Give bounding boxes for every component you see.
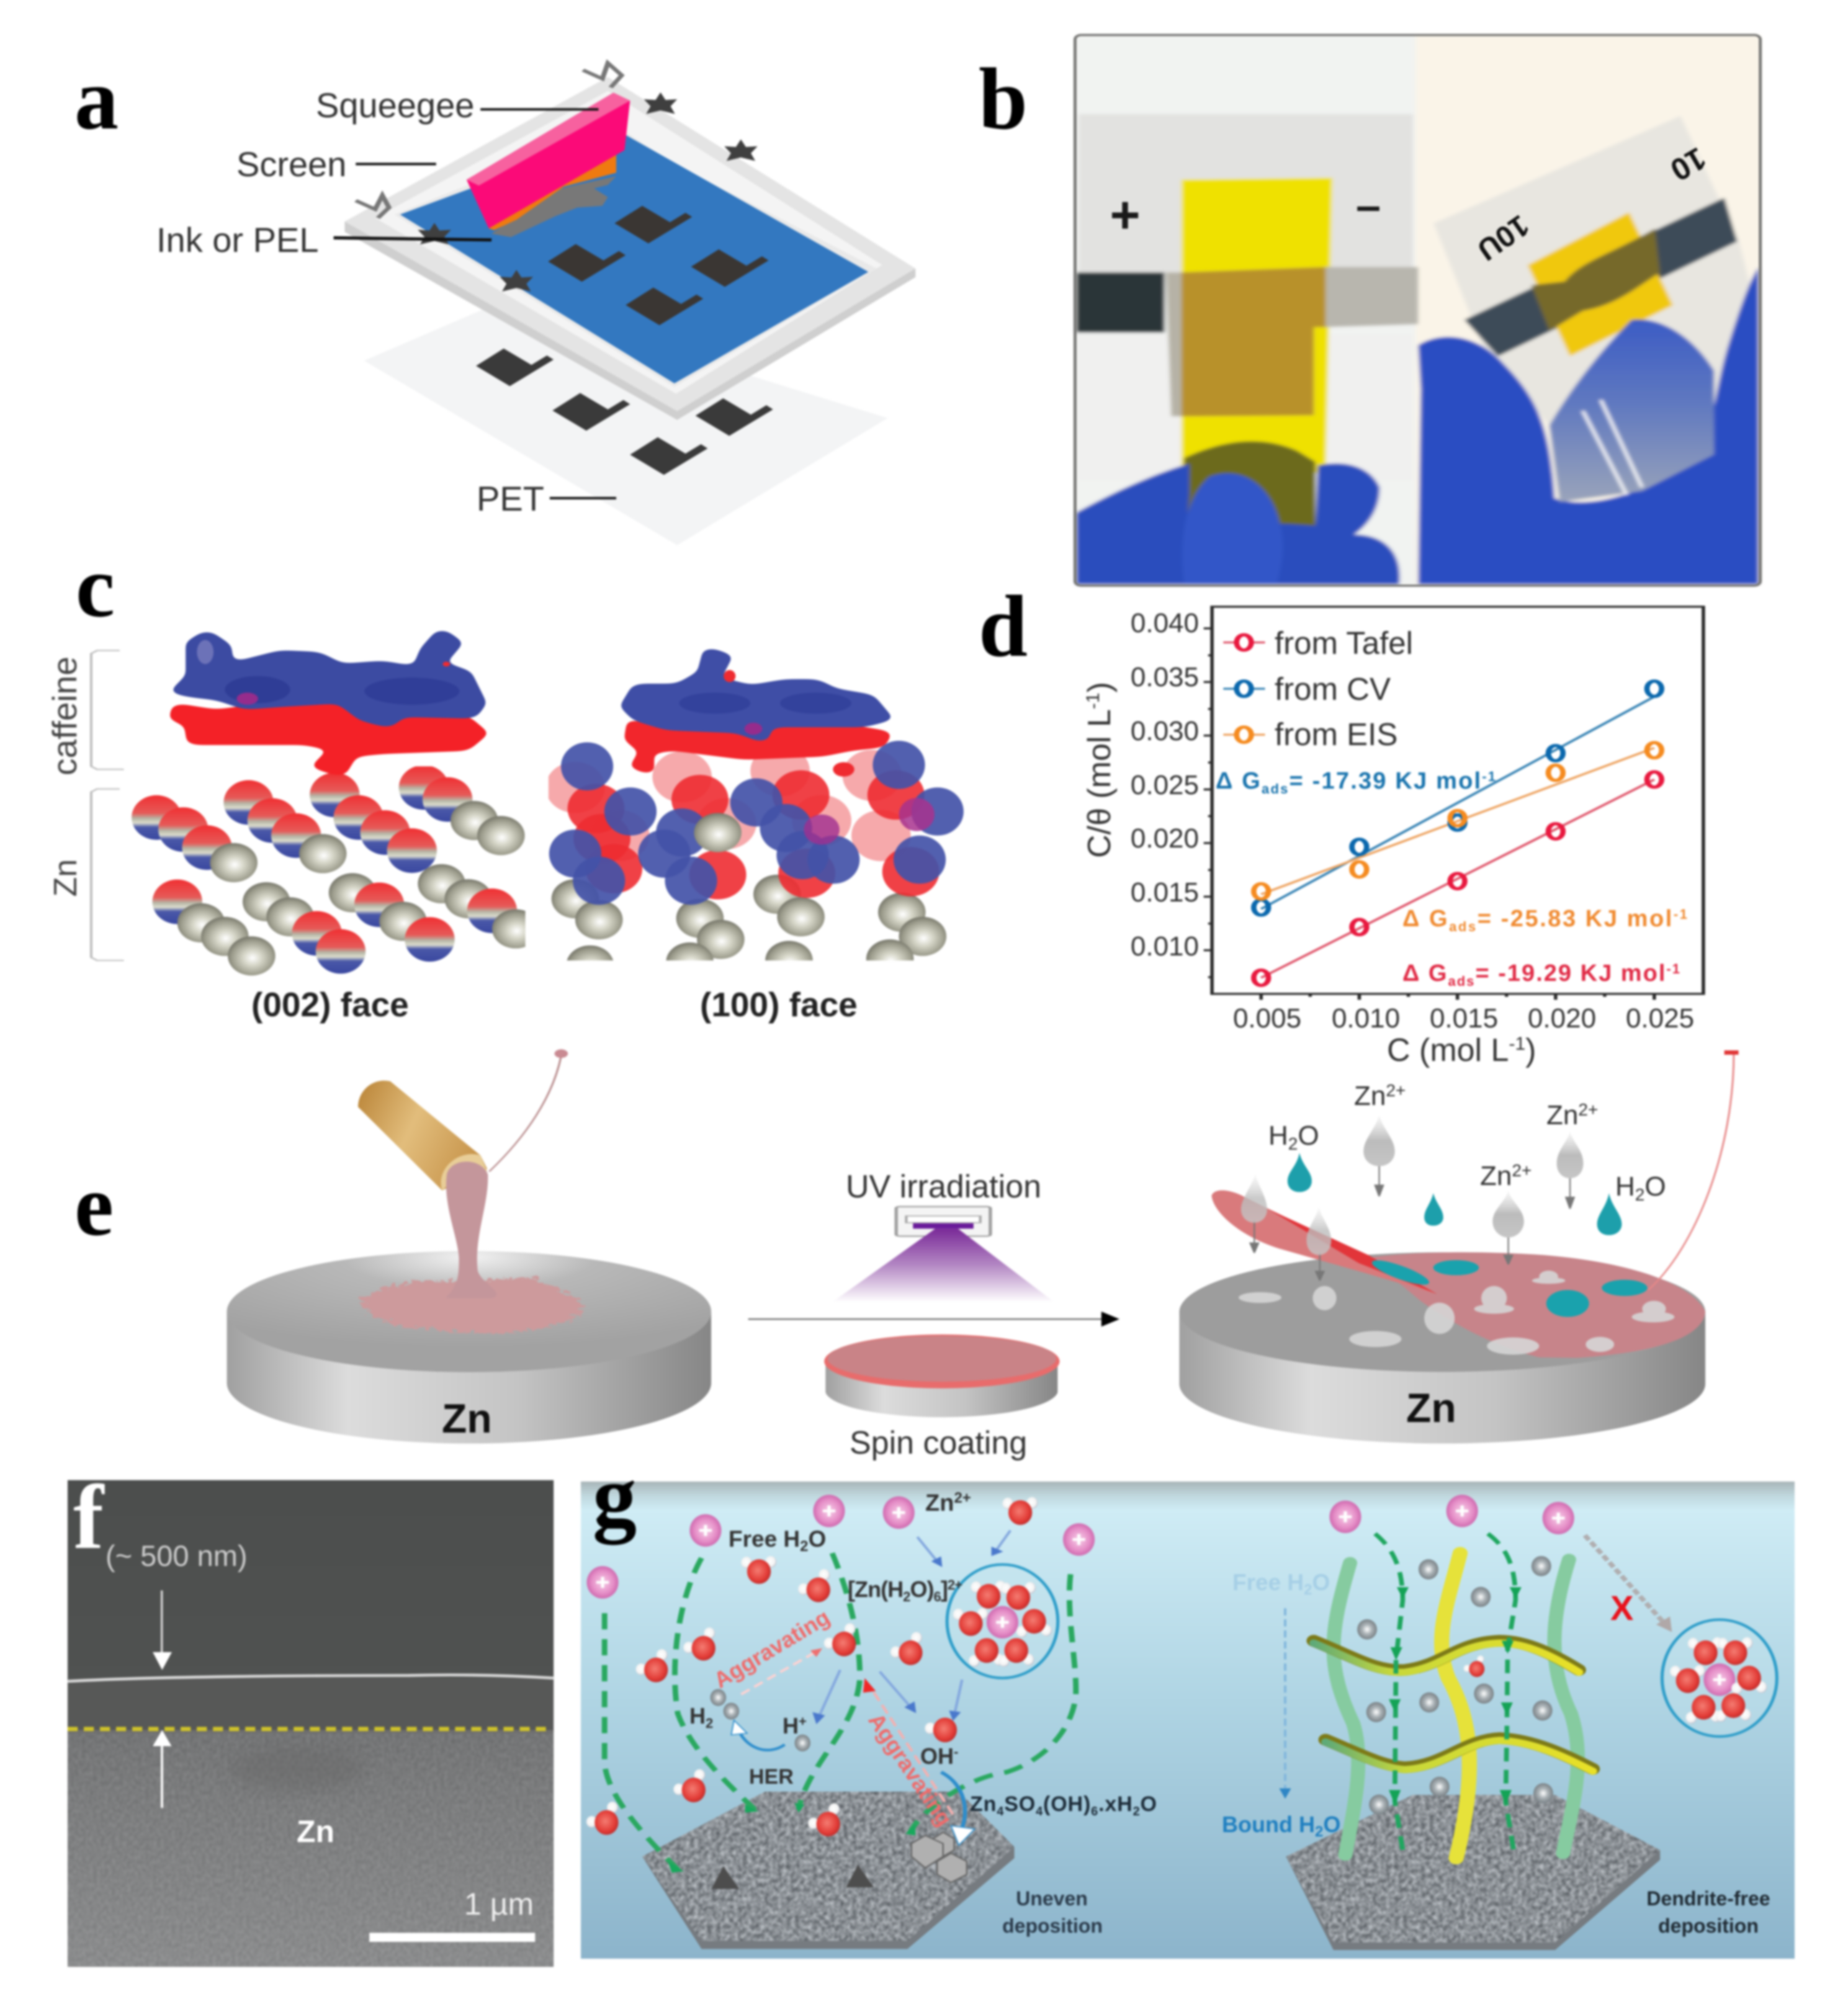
x tick labels: 0.010 [1332,1003,1400,1034]
photo border [1075,35,1761,586]
x axis title: C (mol L [1387,1032,1509,1068]
y tick labels: 0.025 [1131,770,1199,800]
x tick labels: 0.020 [1528,1003,1596,1034]
free to bound water arrow [1279,1608,1291,1799]
orange squeegee holder [489,152,616,230]
by-product formula: 2 [1133,1805,1140,1818]
panel b: flexible battery photographs [979,35,1761,586]
legend labels: from CV [1275,671,1391,707]
Zn ions [587,1495,1095,1599]
H2 label: 2 [706,1715,713,1731]
hydrated Zn complex label: [Zn(H [848,1576,904,1602]
solvated Zn complex [947,1565,1058,1678]
Free H2O faded label: O [1312,1570,1330,1595]
series from Tafel markers [1254,772,1662,985]
line chart plot [1204,607,1703,1000]
blocked X mark: X [1610,1588,1633,1627]
aggravating dashed arrows [741,1648,953,1814]
green Zn ion paths [604,1553,1076,1869]
film thickness label: (~ 500 nm) [105,1539,248,1572]
Free H2O label: 2 [800,1538,809,1555]
by-product formula: (OH) [1043,1792,1090,1816]
x tick labels: 0.015 [1430,1003,1498,1034]
x tick labels: 0.005 [1233,1003,1301,1034]
thickness arrows [153,1591,172,1808]
legend symbols [1223,635,1265,742]
printed patterns on PET [476,349,773,475]
red lead line [1648,1050,1739,1290]
(100) face label: (100) face [700,985,858,1024]
by-product formula: Zn [970,1792,996,1816]
H2O label two: 2 [1635,1185,1644,1204]
printed patterns on screen [548,206,769,325]
pink polymer layer [1368,1252,1705,1358]
thin red lead line [489,1049,568,1171]
H+ label: + [799,1714,807,1729]
H2O label one: O [1298,1120,1319,1151]
hydrated Zn complex label: O) [910,1576,935,1602]
pink precursor puddle [358,1275,576,1330]
Zn ions [1329,1495,1574,1534]
H2O label two: O [1644,1171,1666,1202]
hexagonal by-product plates [912,1832,967,1882]
green arrowheads [1389,1587,1522,1805]
y tick labels: 0.030 [1131,716,1199,746]
panel letter c: c [76,537,115,635]
panel g: deposition mechanism schematic [581,1447,1795,1959]
pink squeegee [467,92,630,228]
blue Gibbs energy annotation: Δ G [1216,768,1260,794]
printing frame [344,77,915,420]
panel letter a: a [74,50,119,148]
green vertical fibers [1334,1560,1578,1855]
SEM coating layer [68,1678,554,1732]
red Gibbs energy annotation: = -19.29 KJ mol [1475,960,1665,986]
process arrow [748,1312,1119,1326]
x tick labels: 0.025 [1626,1003,1694,1034]
caffeine and Zn brackets [91,651,124,960]
Zn2+ label two: Zn [1546,1100,1578,1130]
H2O label one: H [1268,1120,1288,1151]
legend labels: from EIS [1275,717,1397,752]
handwritten right label: 10 [1664,141,1712,188]
panel a: screen printing schematic [74,50,915,545]
blue Gibbs energy annotation: ads [1262,781,1288,797]
label squeegee: Squeegee [316,86,474,125]
panel letter f: f [73,1467,105,1568]
Zn2+ label three: Zn [1480,1161,1512,1191]
falling grey Zn ions [1241,1115,1583,1281]
free water molecules [586,1497,1038,1836]
Free H2O label: Free H [729,1526,800,1552]
coated Zn disc [1179,1253,1705,1444]
dendrite-free deposition label: Dendrite-free [1646,1887,1770,1910]
blocked complex arrow [1585,1536,1672,1632]
(002) face label: (002) face [251,985,409,1024]
blue Gibbs energy annotation: -1 [1482,769,1496,784]
photo background [1075,35,1761,586]
Zn2+ ion label: 2+ [954,1490,971,1506]
left Zn plate [642,1792,1015,1949]
y tick labels: 0.015 [1131,877,1199,908]
y tick labels: 0.035 [1131,662,1199,692]
red Gibbs energy annotation: Δ G [1402,960,1447,986]
blocked solvated Zn complex [1662,1620,1777,1737]
(002) caffeine blue lobe [177,632,480,724]
red Gibbs energy annotation: -1 [1666,961,1680,977]
x axis title: ) [1525,1032,1536,1068]
hydrated Zn complex label: 6 [934,1589,941,1604]
by-product formula: SO [1004,1792,1035,1816]
hydrogen atoms [711,1689,810,1751]
left side: uneven deposition [586,1495,1095,1949]
bare Zn disc [227,1251,711,1444]
y tick labels: 0.010 [1131,931,1199,962]
hydrated Zn complex label: 2+ [948,1577,962,1593]
H2 label: H [689,1703,706,1728]
dashed yellow interface [68,1725,550,1733]
label leader lines [334,109,616,498]
HER label: HER [749,1765,794,1789]
uneven deposition label: deposition [1002,1915,1103,1937]
blue Gibbs energy annotation: = -17.39 KJ mol [1290,768,1481,794]
legend labels: from Tafel [1275,625,1413,661]
SEM vacuum region [68,1480,554,1679]
(002) caffeine red lobe [174,703,483,774]
SEM Zn substrate [68,1730,554,1967]
label PET: PET [477,479,544,518]
series from EIS markers [1254,743,1662,899]
orange Gibbs energy annotation: Δ G [1402,906,1448,932]
Zn2+ ion label: Zn [925,1490,954,1516]
black and gray electrodes [1076,267,1418,416]
panel d: adsorption isotherm chart [979,577,1703,1068]
panel e: coating process schematic [74,1049,1739,1461]
Zn2+ label one: Zn [1354,1081,1386,1111]
right yellow strip [1528,212,1673,356]
red Gibbs energy annotation: ads [1448,973,1474,989]
handwritten left label: 10U [1471,208,1535,267]
x tick labels [1233,1003,1694,1034]
dendrite piles [711,1864,874,1889]
label screen: Screen [236,145,346,184]
fit lines [1261,697,1654,978]
electrolyte background [581,1482,1795,1959]
Zn substrate label: Zn [297,1814,334,1849]
Bound H2O label: 2 [1315,1823,1323,1840]
UV irradiation label: UV irradiation [846,1169,1041,1205]
yellow vertical fiber [1442,1553,1469,1858]
ink or PEL bead [491,176,616,237]
olive stain under thumb [1184,441,1316,525]
Zn2+ label two: 2+ [1578,1100,1598,1119]
Bound H2O label: Bound H [1222,1812,1315,1837]
by-product formula: 4 [1036,1805,1043,1818]
right Zn plate [1286,1795,1660,1950]
by-product formula: 4 [997,1805,1004,1818]
legend labels [1275,625,1413,752]
precursor tube [358,1081,487,1191]
H2O label one: 2 [1288,1134,1298,1153]
photo contents [1075,35,1761,586]
orange Gibbs energy annotation: -1 [1674,906,1687,922]
Zn axis label: Zn [48,859,84,897]
Bound H2O label: O [1323,1812,1340,1837]
Zn2+ label one: 2+ [1386,1081,1406,1100]
by-product formula: O [1141,1792,1157,1816]
H2O label two: H [1615,1171,1635,1202]
aggravating label two: Aggravating [863,1709,958,1831]
(100) caffeine red lobe [629,721,887,772]
right electrode band [1464,198,1737,356]
y axis title: C/θ (mol L [1082,709,1118,858]
left pouch film [1079,114,1413,480]
uneven deposition label: Uneven [1016,1887,1088,1910]
peeling polymer flap [1211,1191,1437,1294]
lower horizontal fiber [1325,1738,1593,1771]
blue reaction arrows [812,1531,1010,1724]
by-product formula: 6 [1091,1805,1098,1818]
caffeine axis label: caffeine [45,656,84,776]
Zn label right: Zn [1406,1385,1456,1431]
small red charge spots [443,661,854,777]
x axis title: -1 [1509,1034,1525,1054]
right side: dendrite-free deposition [1279,1495,1777,1950]
hydrated Zn complex label: ] [941,1576,948,1602]
OH- label: OH [920,1743,954,1769]
OH- label: - [954,1744,958,1760]
right blue glove [1418,267,1759,584]
aggravating label one: Aggravating [709,1604,834,1693]
panel letter b: b [979,50,1028,148]
panel letter e: e [74,1156,114,1254]
blue screen mesh [400,133,868,383]
right brown overlap [1532,229,1660,331]
green ion paths [1375,1534,1515,1850]
spin coated disc [824,1335,1060,1417]
Zn2+ label three: 2+ [1512,1161,1532,1180]
free water molecule in network [1464,1655,1484,1677]
bright film surface line [68,1675,554,1681]
hydrogel fiber network [1314,1553,1593,1858]
PET substrate sheet [364,300,888,545]
scale label: 1 µm [464,1887,534,1921]
panel c: charge density of caffeine on Zn [45,537,964,1024]
light deposit spots [1239,1271,1674,1354]
Free H2O faded label: 2 [1304,1581,1312,1598]
orange Gibbs energy annotation: = -25.83 KJ mol [1478,906,1672,932]
orange Gibbs energy annotation: ads [1449,919,1476,934]
panel letter g: g [593,1447,637,1545]
spin coating label: Spin coating [850,1425,1027,1461]
label ink or PEL: Ink or PEL [156,220,318,259]
axes frame [1212,607,1703,994]
curved blue HER and by-product arrows [731,1720,975,1845]
handwritten plus sign: + [1110,186,1141,244]
scale bar [369,1933,535,1942]
y axis title: ) [1082,682,1118,692]
y axis title: -1 [1083,692,1103,709]
yellow polyimide strip [1182,178,1332,473]
(100) Zn atoms and orbital lobes [545,741,964,985]
y tick labels: 0.040 [1131,608,1199,638]
by-product formula: .xH [1098,1792,1133,1816]
left blue glove [1076,463,1399,584]
panel letter d: d [979,577,1028,675]
hydrated Zn complex label: 2 [903,1589,910,1604]
frame knobs and clamps [356,63,758,292]
handwritten minus sign: – [1356,181,1381,231]
Zn label left: Zn [442,1395,492,1441]
Free H2O faded label: Free H [1232,1570,1304,1595]
upper horizontal fiber [1314,1641,1579,1673]
y tick labels: 0.020 [1131,823,1199,854]
H+ label: H [783,1713,799,1738]
teal water on surface [1366,1256,1648,1317]
Free H2O label: O [809,1526,826,1552]
UV beam [832,1228,1054,1302]
pouring stream [446,1161,496,1298]
series from CV markers [1254,681,1662,915]
green arrowheads [668,1803,915,1873]
hydroxide ion [925,1718,957,1742]
teal water drops [1288,1153,1621,1235]
UV lamp [896,1207,990,1236]
(100) caffeine blue lobe [626,651,887,740]
(002) Zn atom layers [132,765,540,975]
dendrite-free deposition label: deposition [1658,1915,1759,1937]
bound water molecules [1357,1556,1553,1815]
panel f: SEM cross section [68,1467,554,1967]
right film [1433,116,1758,502]
y tick labels [1131,608,1199,962]
